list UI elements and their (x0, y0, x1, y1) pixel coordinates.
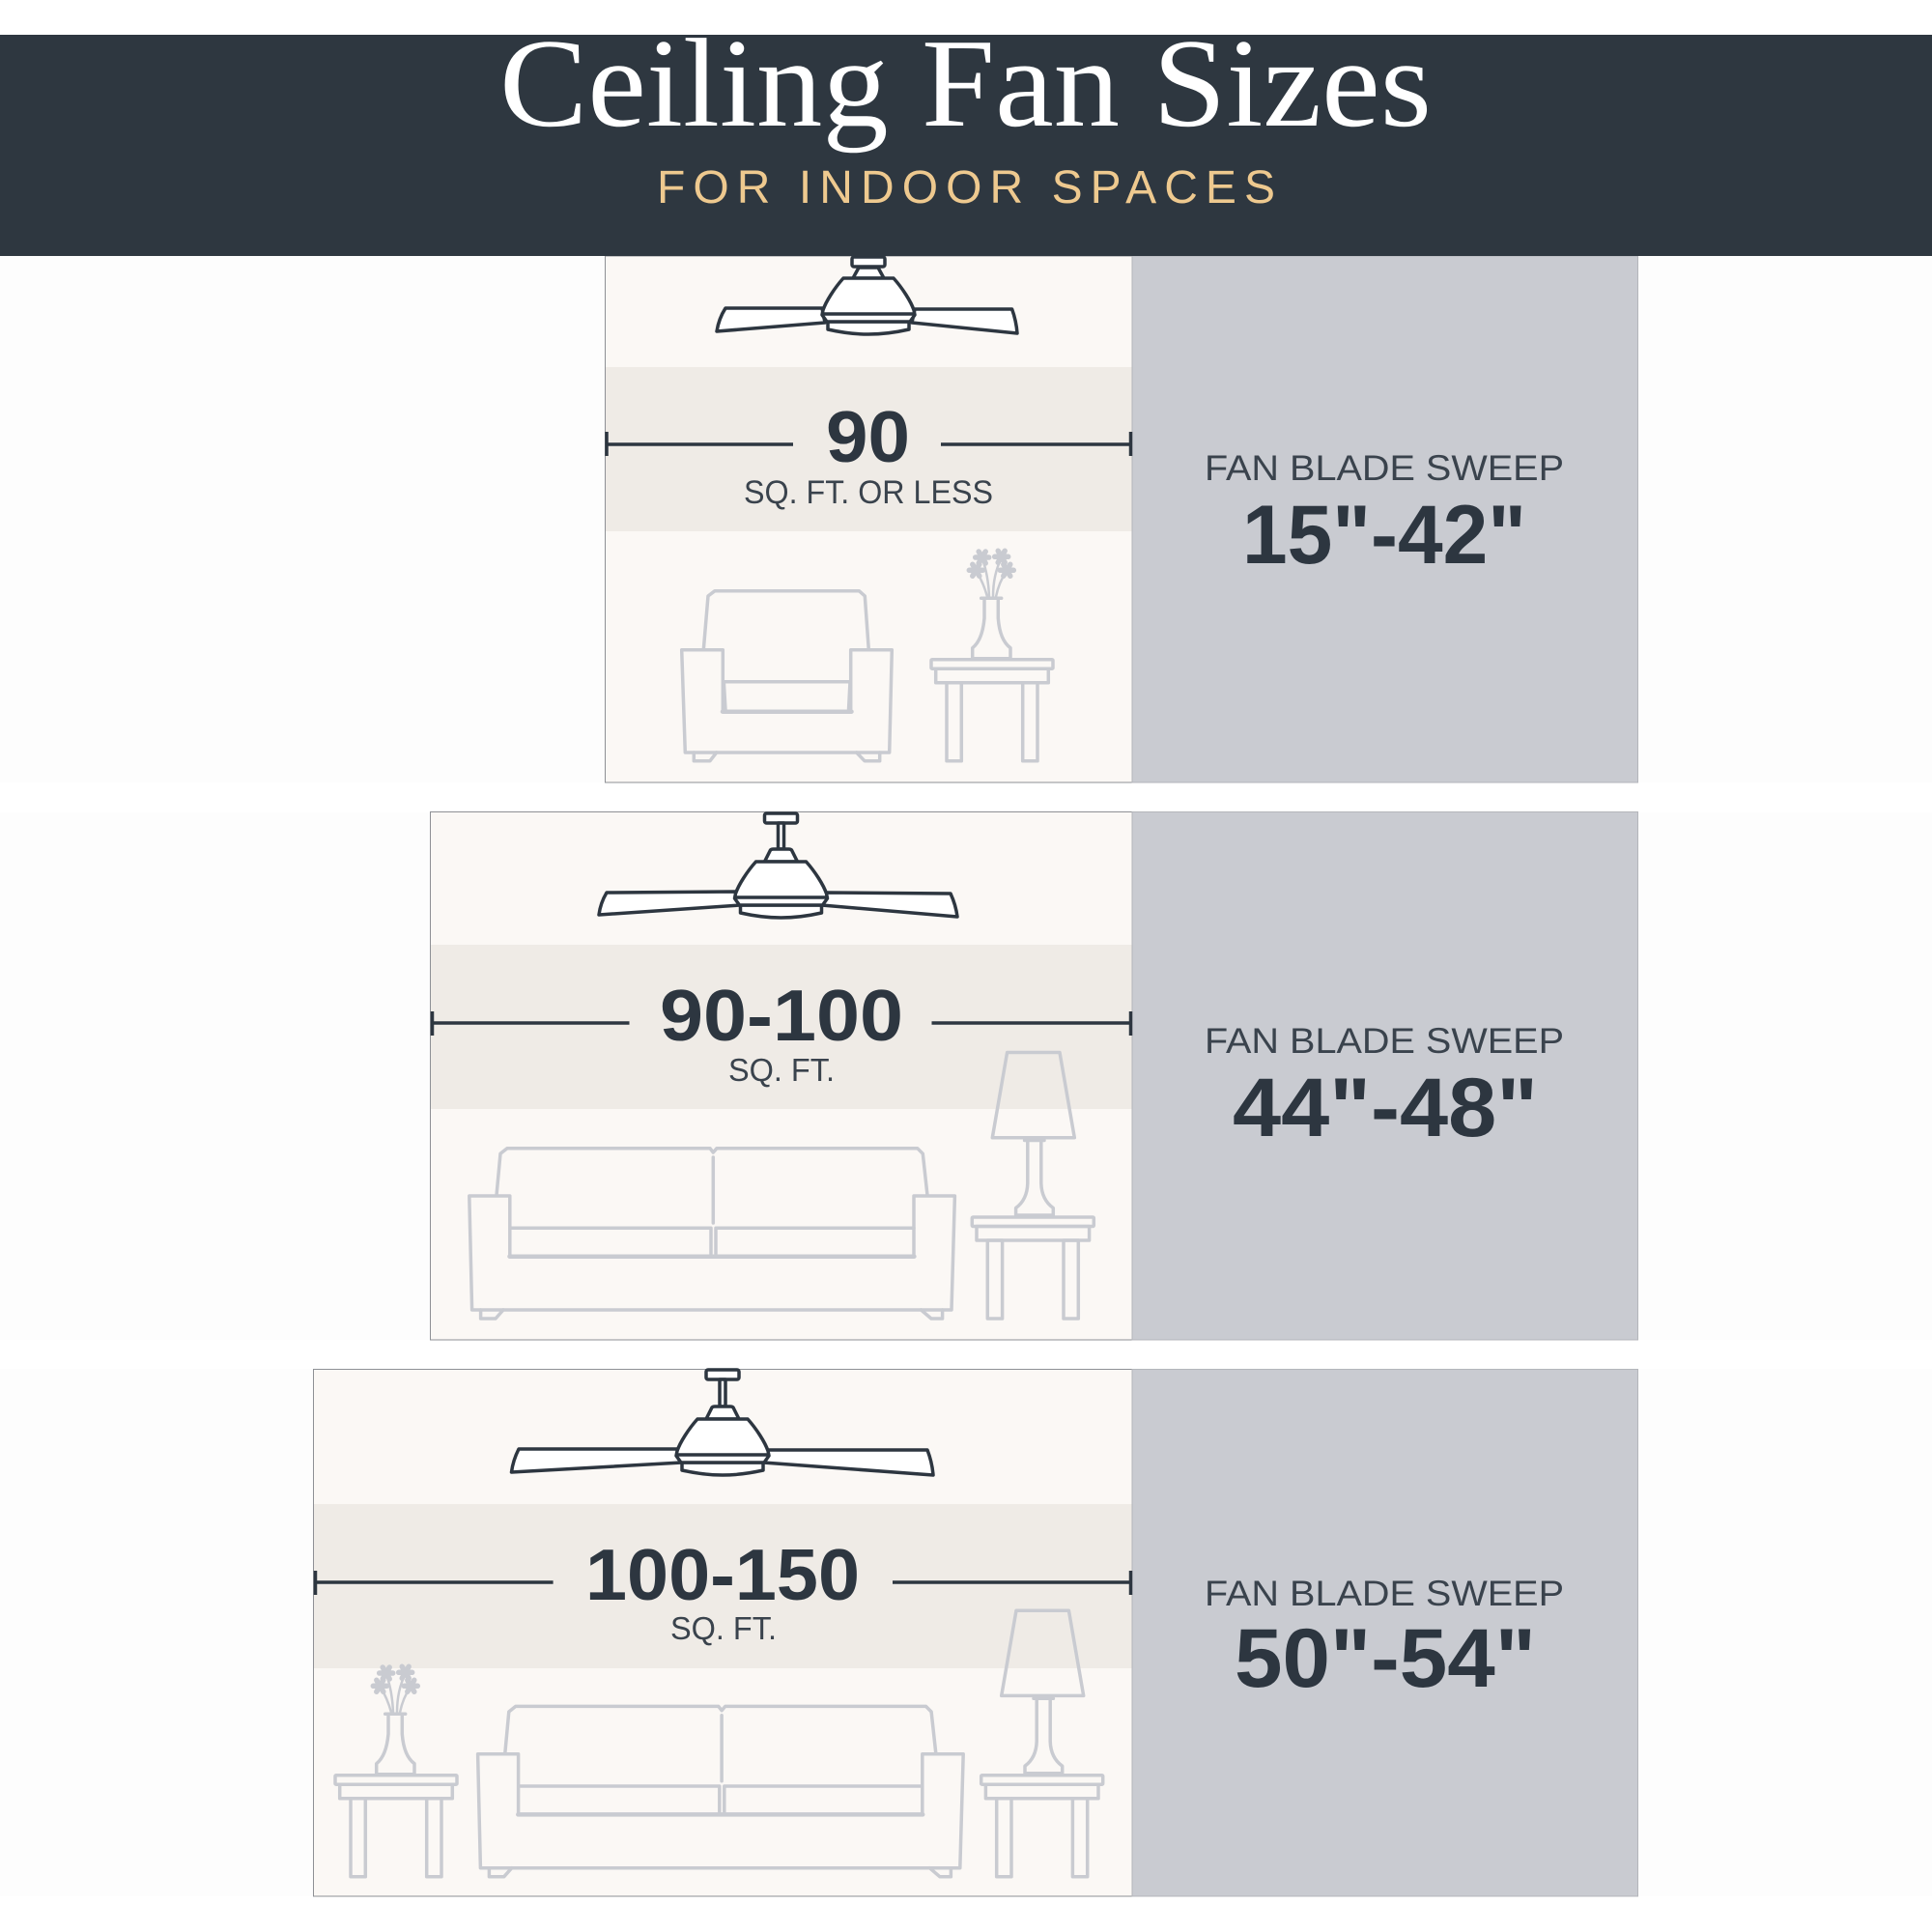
icon: side table with lamp (972, 1053, 1094, 1319)
arrow: room width measure (607, 432, 1131, 456)
room size unit: SQ. FT. (670, 1610, 777, 1646)
icon: side table with vase (335, 1666, 457, 1877)
icon: side table with vase (931, 551, 1053, 761)
title: Ceiling Fan Sizes (499, 14, 1432, 154)
icon: ceiling fan (599, 813, 957, 918)
arrow: room width measure (432, 1011, 1131, 1036)
icon: side table with lamp (981, 1610, 1103, 1877)
fan blade sweep panel (1132, 1370, 1638, 1896)
sweep label: FAN BLADE SWEEP (1205, 448, 1564, 488)
arrow: room width measure (315, 1571, 1131, 1595)
sweep value: 50"-54" (1235, 1612, 1536, 1705)
fan blade sweep panel (1132, 256, 1638, 782)
panel: 100-150 sq ft room (313, 1370, 1638, 1896)
icon: sofa (478, 1706, 963, 1877)
icon: sofa (469, 1149, 954, 1319)
measurement band (431, 945, 1132, 1109)
sweep value: 44"-48" (1233, 1062, 1538, 1154)
icon: ceiling fan (717, 257, 1017, 334)
room background (431, 811, 1132, 1340)
room size number: 90-100 (660, 975, 903, 1056)
sweep value: 15"-42" (1242, 489, 1526, 582)
room size unit: SQ. FT. (728, 1052, 835, 1088)
fan blade sweep panel (1132, 811, 1638, 1340)
room background (605, 256, 1132, 782)
room background (313, 1370, 1132, 1896)
panel: 90 sq ft room (605, 256, 1638, 782)
measurement band (606, 367, 1132, 531)
subtitle: FOR INDOOR SPACES (657, 162, 1275, 213)
banner background (0, 35, 1932, 256)
room size number: 90 (826, 396, 910, 477)
measurement band (314, 1504, 1132, 1668)
icon: armchair (682, 591, 892, 761)
sweep label: FAN BLADE SWEEP (1205, 1574, 1564, 1613)
room size unit: SQ. FT. OR LESS (744, 474, 993, 511)
header banner (0, 14, 1932, 256)
room size number: 100-150 (585, 1534, 860, 1615)
sweep label: FAN BLADE SWEEP (1205, 1021, 1564, 1061)
panel: 90-100 sq ft room (431, 811, 1638, 1340)
icon: ceiling fan (512, 1370, 933, 1475)
